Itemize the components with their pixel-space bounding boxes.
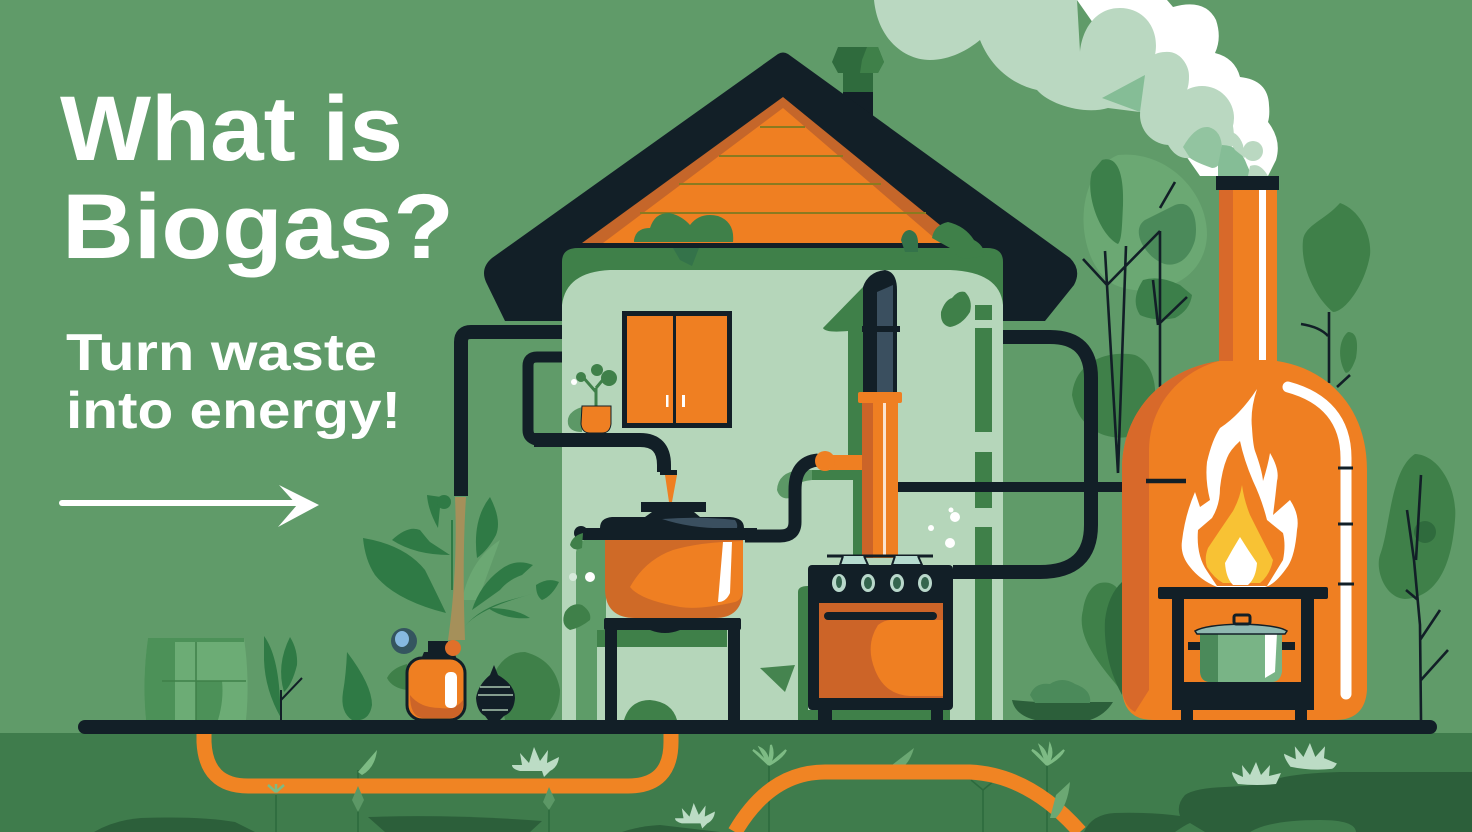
plant cluster [363,495,559,640]
ground line [78,720,1437,734]
leaf behind canister [387,664,407,690]
sparkles [928,508,960,548]
stove [808,556,953,720]
roof [484,52,1077,321]
orange tap and valve [660,451,862,502]
potted plant [568,364,617,433]
subtitle: into energy! [66,382,401,440]
vines on roof [634,213,984,327]
house [484,47,1077,720]
arrow [62,485,319,527]
pot [1188,615,1295,682]
title [60,78,454,278]
digester tank [1122,176,1367,720]
underground stems and leaves in front [268,782,1070,818]
bush behind vase [495,652,560,720]
house wall [562,248,1003,720]
low leaf bowl [1012,680,1113,720]
underground flowers [512,743,1337,828]
smoke cloud [874,0,1278,176]
chimney [832,47,884,120]
ground [0,733,1472,832]
title: What is [60,78,403,180]
subtitle: Turn waste [66,324,377,382]
digester pot [574,502,757,720]
background trees [1072,155,1455,720]
burner stand with pot [1158,587,1328,720]
barrel [144,638,248,720]
underground pipes [204,734,1080,832]
underground plants behind pipes [276,745,1064,832]
subtitle [66,324,401,440]
vertical flue [858,270,902,558]
small plants [264,636,372,720]
orange gas canister [407,640,465,720]
leaves near house [563,533,795,692]
small bubble icon [391,628,417,654]
flame [1182,389,1298,587]
dark vase [476,665,515,720]
pipes [461,332,1124,572]
title: Biogas? [62,176,454,278]
window [622,311,732,428]
